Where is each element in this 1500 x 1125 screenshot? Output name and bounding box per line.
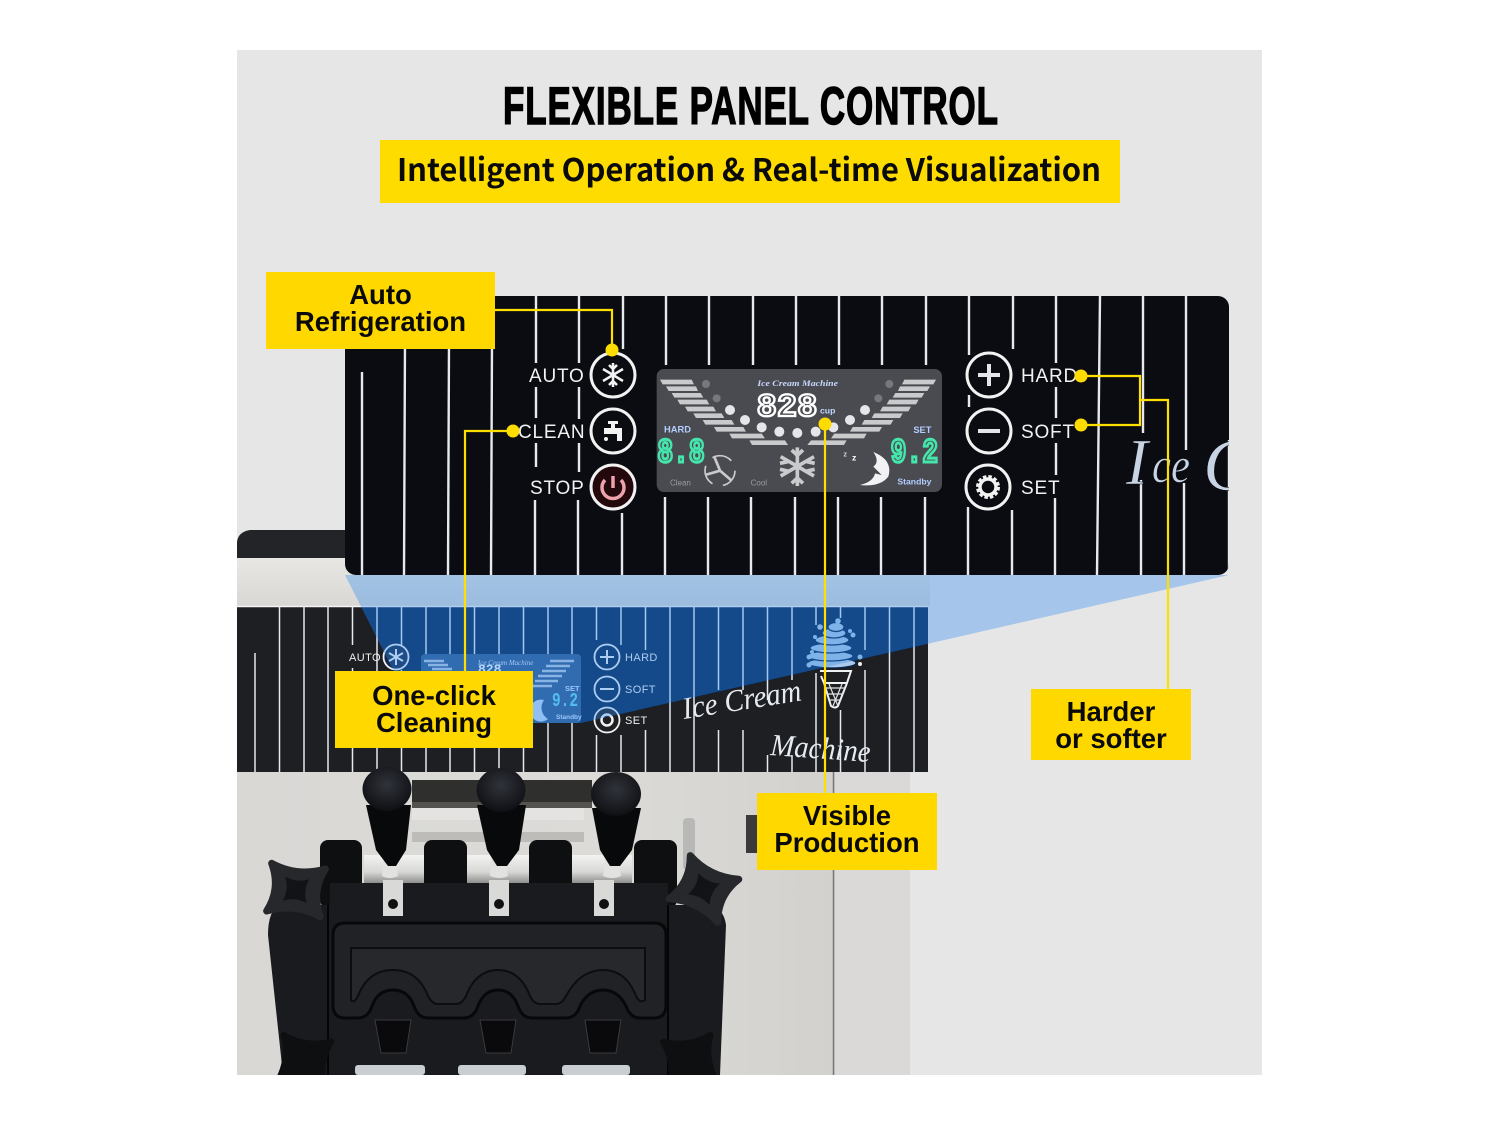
chrome tabs <box>383 880 614 916</box>
small display: Standby <box>556 714 582 721</box>
icon: clean tap button <box>591 409 635 453</box>
callout: one-click cleaning: One-click <box>372 680 497 711</box>
panel vertical pinstripes <box>362 296 1229 575</box>
blue projection beam <box>345 575 1229 723</box>
icon: stop power button <box>591 465 635 509</box>
callout: auto refrigeration: Auto <box>349 279 412 310</box>
button labels right <box>1021 366 1078 499</box>
panel script logo: I <box>1125 426 1151 499</box>
button labels right: SOFT <box>1021 422 1075 443</box>
display snowflake icon <box>780 447 815 486</box>
display set value: 9.2 <box>891 435 938 473</box>
machine lid <box>237 530 345 558</box>
button labels left: CLEAN <box>518 422 585 443</box>
display standby label: Standby <box>897 477 932 487</box>
callout: one-click cleaning: Cleaning <box>376 707 492 738</box>
callout: auto refrigeration: Refrigeration <box>295 306 466 337</box>
display cool label: Cool <box>751 479 767 488</box>
icon: minus button <box>967 409 1011 453</box>
small panel script logo <box>679 673 872 769</box>
grey background panel <box>237 50 1262 1075</box>
icon: plus button <box>967 353 1011 397</box>
callout connectors <box>465 310 1168 793</box>
small display: 828 <box>478 662 502 677</box>
bottom white nozzles <box>355 1065 630 1075</box>
small panel script logo: Machine <box>769 727 872 769</box>
small display <box>421 654 582 723</box>
subtitle banner <box>380 140 1120 203</box>
display fan icon <box>705 456 735 486</box>
small display: Ice Cream Machine <box>477 659 533 667</box>
display set label: SET <box>913 425 932 435</box>
display clean label: Clean <box>670 479 691 488</box>
three dispensing handles <box>362 767 641 878</box>
display chevron stripes <box>660 380 936 445</box>
callout dots <box>506 344 1088 438</box>
chrome bar <box>364 855 632 883</box>
bottom knobs <box>278 1032 716 1075</box>
display hard value: 8.8 <box>657 435 705 473</box>
small display: 9.2 <box>552 690 578 712</box>
callout: one-click cleaning <box>335 671 533 748</box>
side dark label <box>746 815 758 853</box>
callout: visible production: Production <box>774 827 920 858</box>
small panel labels: HARD <box>625 652 658 664</box>
button labels left: STOP <box>530 478 585 499</box>
display moon icon <box>860 452 889 485</box>
icon: gear button <box>966 465 1010 509</box>
large control panel <box>345 296 1254 575</box>
machine lower steel body <box>237 772 910 1075</box>
dispensing slots <box>375 1020 621 1053</box>
digital display: z <box>852 453 857 463</box>
black rollers <box>320 840 677 908</box>
small panel labels: SOFT <box>625 684 656 696</box>
display snow dots <box>702 380 893 438</box>
display cup label: cup <box>820 405 835 415</box>
small panel labels <box>349 652 658 727</box>
callout: auto refrigeration <box>266 272 495 349</box>
machine photo <box>237 530 930 1089</box>
small display: SET <box>565 684 580 693</box>
side pin <box>683 818 695 870</box>
top star knobs <box>267 856 739 922</box>
button labels left <box>518 366 585 499</box>
subtitle banner: Intelligent Operation & Real-time Visualization <box>397 145 1101 190</box>
icon: auto snowflake button <box>591 353 635 397</box>
small panel buttons <box>384 644 620 732</box>
display hard label: HARD <box>664 425 691 435</box>
front black plate <box>268 883 726 1089</box>
button labels right: HARD <box>1021 366 1078 387</box>
machine upper body <box>237 558 930 606</box>
callout: visible production <box>757 793 937 870</box>
display title: Ice Cream Machine <box>756 379 839 388</box>
button labels left: AUTO <box>529 366 585 387</box>
display sleep marks: z <box>843 450 847 459</box>
digital display <box>657 369 942 492</box>
panel script logo: ce <box>1152 437 1190 493</box>
title: FLEXIBLE PANEL CONTROL <box>503 76 998 136</box>
small panel labels: AUTO <box>349 652 381 664</box>
callout: harder or softer: or softer <box>1055 723 1167 754</box>
display cup count: 828 <box>757 389 817 426</box>
button labels right: SET <box>1021 478 1060 499</box>
ice cream cone icon <box>806 618 862 708</box>
small panel labels: SET <box>625 715 648 727</box>
rear bar behind handles <box>412 780 592 842</box>
small panel script logo: Ice Cream <box>679 673 804 726</box>
callout: visible production: Visible <box>803 800 891 831</box>
small control panel <box>237 606 928 772</box>
infographic canvas <box>237 50 1262 1075</box>
panel script logo: C <box>1203 425 1254 507</box>
callout: harder or softer: Harder <box>1067 696 1156 727</box>
callout: harder or softer <box>1031 689 1191 760</box>
